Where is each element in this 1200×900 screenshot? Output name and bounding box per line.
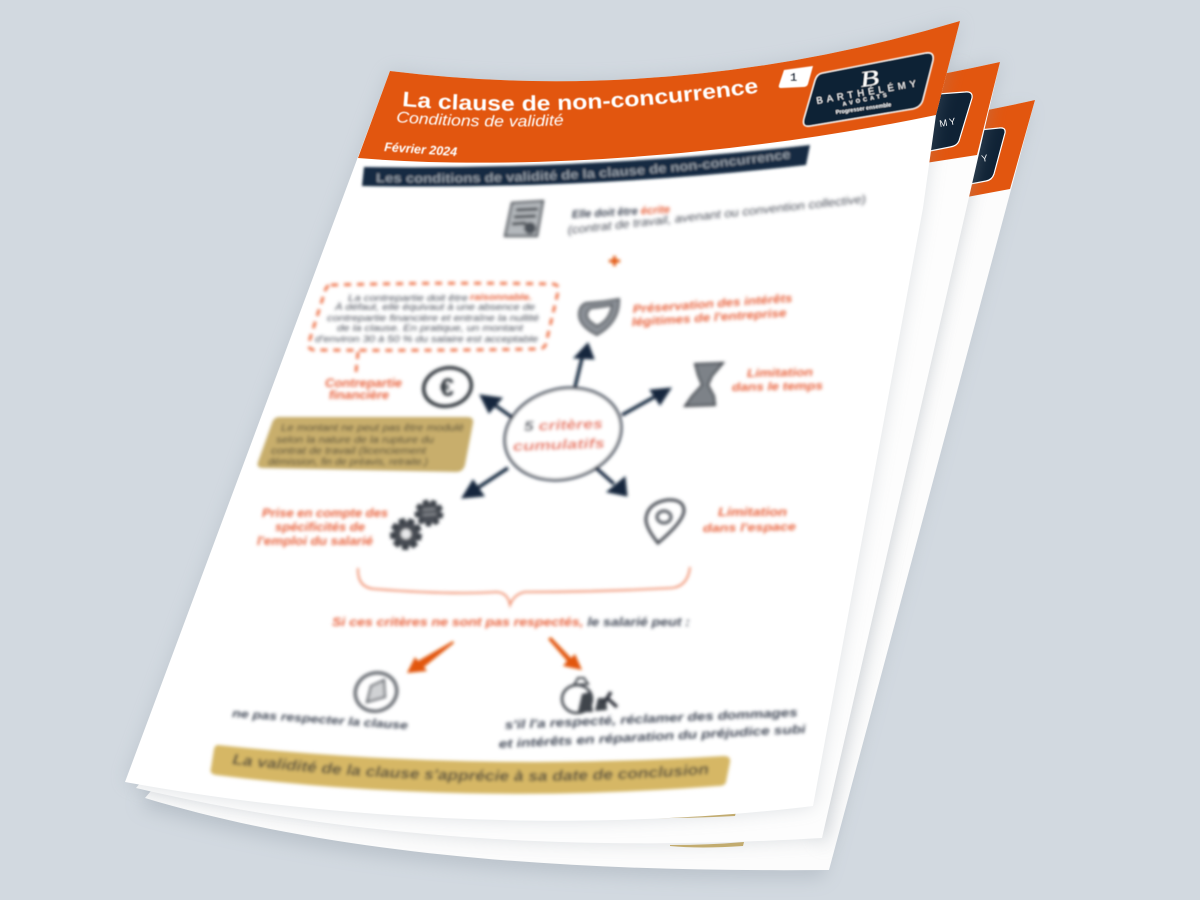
criterion label: financial counterpart: Contrepartie — [325, 378, 403, 390]
dashed callout: financial counterpart: La contrepartie doit être — [348, 293, 468, 304]
option: claim damages: et intérêts en réparation du préjudice subi — [498, 722, 807, 751]
criterion label: job specifics: Prise en compte des — [262, 508, 388, 520]
icon: location pin — [646, 500, 684, 543]
criterion label: legitimate interests — [631, 293, 793, 329]
logo: AVOCATS — [842, 93, 888, 108]
sheet 3 (back) — [139, 100, 1035, 878]
arrows from centre — [462, 343, 671, 498]
criterion label: time limit: dans le temps — [732, 380, 823, 394]
logo: BARTHÉLÉMY — [816, 78, 918, 107]
criterion label: legitimate interests: Préservation des intérêts — [632, 293, 793, 316]
arrow: lower left — [462, 468, 508, 498]
date: Février 2024 — [384, 140, 458, 159]
criterion label: financial counterpart — [325, 378, 403, 402]
dashed callout: financial counterpart — [309, 283, 558, 372]
criterion label: job specifics — [257, 508, 388, 548]
front sheet shadow — [125, 21, 960, 821]
criterion label: job specifics: spécificités de — [275, 522, 366, 534]
icon: money bag and gavel — [562, 678, 617, 713]
header band — [358, 21, 960, 163]
icon: hourglass — [685, 363, 723, 406]
central ellipse: 5 critères — [524, 415, 603, 434]
icon: euro — [420, 363, 475, 411]
option: claim damages: s'il l'a respecté, réclamer des dommages — [505, 705, 798, 732]
icon: document — [505, 201, 543, 236]
sheet 2 (middle): MY — [939, 116, 958, 130]
sheet 2 (middle) — [136, 62, 1000, 843]
criterion label: financial counterpart: financière — [329, 390, 390, 402]
central ellipse: cumulatifs — [513, 435, 605, 454]
header text — [384, 81, 758, 159]
written requirement text: (contrat de travail, avenant ou convention collective) — [567, 194, 867, 237]
arrow: right — [622, 388, 671, 415]
arrow: orange right — [548, 637, 582, 670]
logo: B — [858, 65, 881, 92]
option: claim damages — [498, 705, 807, 751]
criterion label: time limit: Limitation — [747, 367, 813, 380]
icon: stop hand — [350, 667, 402, 717]
gold note: contrat de travail (licenciement — [271, 446, 427, 457]
brace — [358, 567, 690, 605]
arrow: orange left — [407, 641, 454, 673]
dashed callout: financial counterpart: À défaut, elle équivaut à une absence de — [334, 302, 535, 313]
logo — [803, 53, 933, 126]
plus sign — [609, 256, 620, 266]
title: La clause de non-concurrence — [402, 81, 758, 112]
dashed callout: financial counterpart: raisonnable. — [470, 292, 532, 303]
body content — [208, 193, 868, 796]
page number badge — [779, 66, 813, 88]
consequence sentence: Si ces critères ne sont pas respectés, le salarié peut : — [332, 615, 690, 629]
gold note: selon la nature de la rupture du — [276, 435, 434, 446]
criterion label: legitimate interests: légitimes de l'entreprise — [631, 308, 788, 329]
bottom gold bar — [208, 742, 732, 796]
icon: gears — [393, 502, 441, 547]
dashed callout: financial counterpart: contrepartie financière et entraîne la nullité — [327, 313, 539, 324]
sheet 3 (back): Y — [981, 153, 989, 165]
icon: euro: € — [440, 374, 454, 402]
criterion label: time limit — [732, 367, 823, 394]
written requirement text: Elle doit être écrite — [572, 204, 670, 221]
criterion label: geographic limit: Limitation — [718, 507, 787, 519]
bottom gold bar: La validité de la clause s'apprécie à sa date de conclusion — [231, 752, 710, 785]
arrow: lower right — [595, 467, 627, 496]
gold note: Le montant ne peut pas être modulé — [281, 423, 464, 434]
section heading bar: Les conditions de validité de la clause de non-concurrence — [374, 150, 792, 185]
gold note: démission, fin de préavis, retraite.) — [268, 457, 428, 468]
icon: shield — [579, 299, 619, 335]
central ellipse — [494, 375, 632, 493]
gold note — [258, 417, 473, 472]
subtitle: Conditions de validité — [396, 110, 564, 128]
criterion label: geographic limit: dans l'espace — [703, 521, 797, 535]
logo: Progresser ensemble — [835, 102, 892, 116]
dashed callout: financial counterpart: d'environ 30 à 50 % du salaire est acceptable — [315, 334, 538, 345]
option: do not respect: ne pas respecter la clause — [232, 708, 409, 732]
criterion label: geographic limit — [703, 507, 797, 535]
dashed callout: financial counterpart: de la clause. En pratique, un montant — [337, 323, 523, 334]
front shadow on sheet 3 — [800, 60, 970, 850]
arrow: upper left — [480, 395, 513, 418]
page number badge: 1 — [790, 71, 797, 85]
criterion label: job specifics: l'emploi du salarié — [257, 536, 374, 548]
arrow: up — [574, 343, 594, 387]
front sheet — [125, 21, 960, 821]
